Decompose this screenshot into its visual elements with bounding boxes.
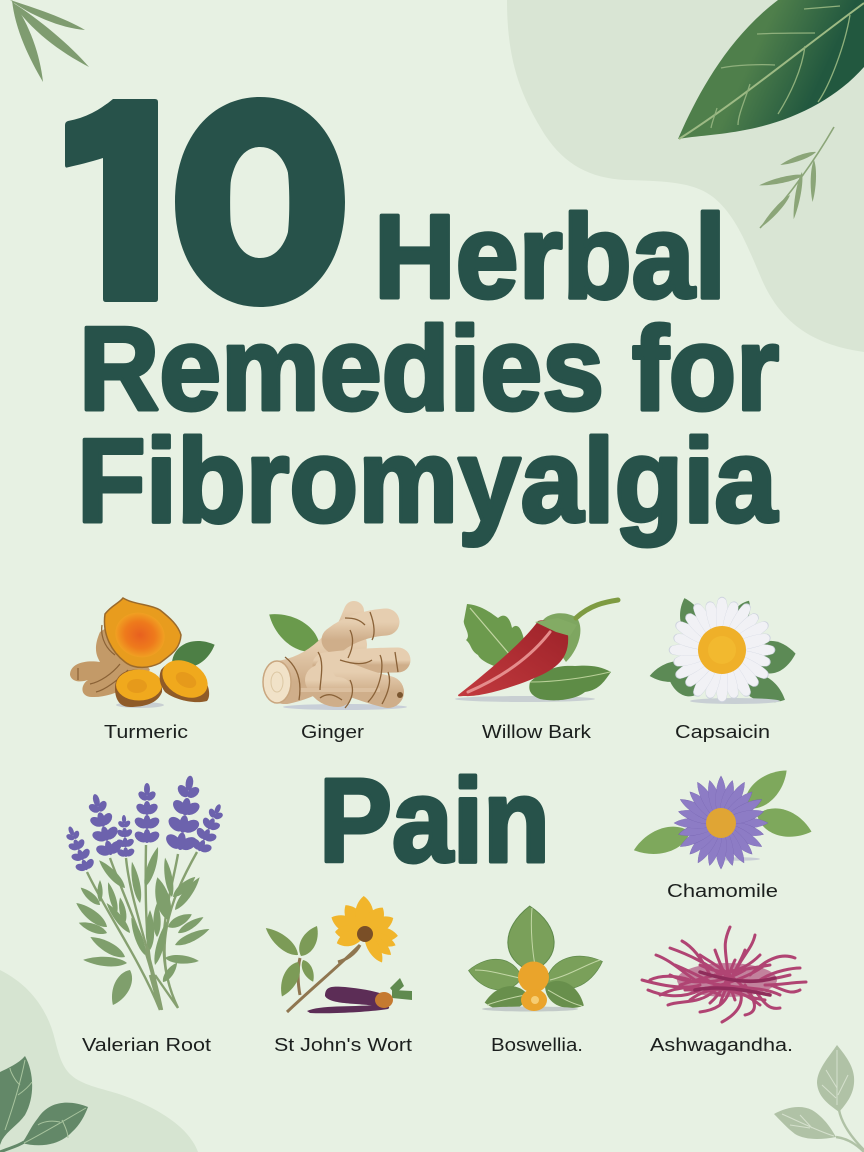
label: St John's Wort: St John's Wort — [274, 1035, 412, 1055]
item: Boswellia — [466, 905, 608, 1055]
label: Ginger: Ginger — [301, 722, 364, 742]
icon: daisy — [648, 595, 798, 711]
icon: lavender bunch — [59, 773, 231, 1010]
icon: turmeric — [70, 598, 219, 708]
background blob: top right — [507, 0, 864, 352]
icon: purple aster flower — [630, 762, 815, 869]
item: Chamomile — [630, 762, 815, 901]
decorative sprig: top left — [10, 0, 89, 82]
item: Valerian Root — [59, 773, 231, 1055]
item: Ashwagandha — [642, 927, 806, 1055]
label: Willow Bark: Willow Bark — [482, 722, 592, 742]
label: Ashwagandha: Ashwagandha. — [650, 1035, 793, 1055]
title: Herbal: Herbal — [374, 190, 726, 324]
item: St John's Wort — [262, 896, 412, 1055]
item: Willow Bark — [455, 600, 618, 742]
icon: ginger — [262, 604, 407, 710]
item: Ginger — [262, 604, 407, 742]
icon: magenta root strands — [642, 927, 806, 1022]
decorative leaves: bottom right — [774, 1045, 864, 1152]
title: number 1: 1 — [65, 43, 158, 361]
label: Boswellia: Boswellia. — [491, 1035, 583, 1055]
decorative large leaf: top right — [678, 0, 864, 139]
label: Turmeric: Turmeric — [104, 722, 188, 742]
icon: yellow flower sprig and roots — [262, 896, 412, 1013]
item: Turmeric — [70, 598, 219, 742]
title: Remedies: Remedies — [79, 302, 604, 436]
label: Valerian Root: Valerian Root — [82, 1035, 211, 1055]
background blob: bottom left — [0, 970, 198, 1152]
item: Capsaicin — [648, 595, 798, 742]
title: Pain: Pain — [319, 754, 550, 888]
title — [65, 97, 780, 548]
label: Chamomile: Chamomile — [667, 881, 778, 901]
title: Fibromyalgia: Fibromyalgia — [77, 414, 778, 548]
icon: leaves and resin — [466, 905, 608, 1016]
title: number 0: 0 — [178, 53, 342, 354]
decorative sprig: top right — [759, 127, 834, 229]
label: Capsaicin: Capsaicin — [675, 722, 770, 742]
decorative leaves: bottom left — [0, 1056, 88, 1152]
icon: red chili and leaves — [455, 600, 618, 702]
title: for: for — [632, 302, 779, 436]
title: number 1 — [65, 99, 158, 302]
